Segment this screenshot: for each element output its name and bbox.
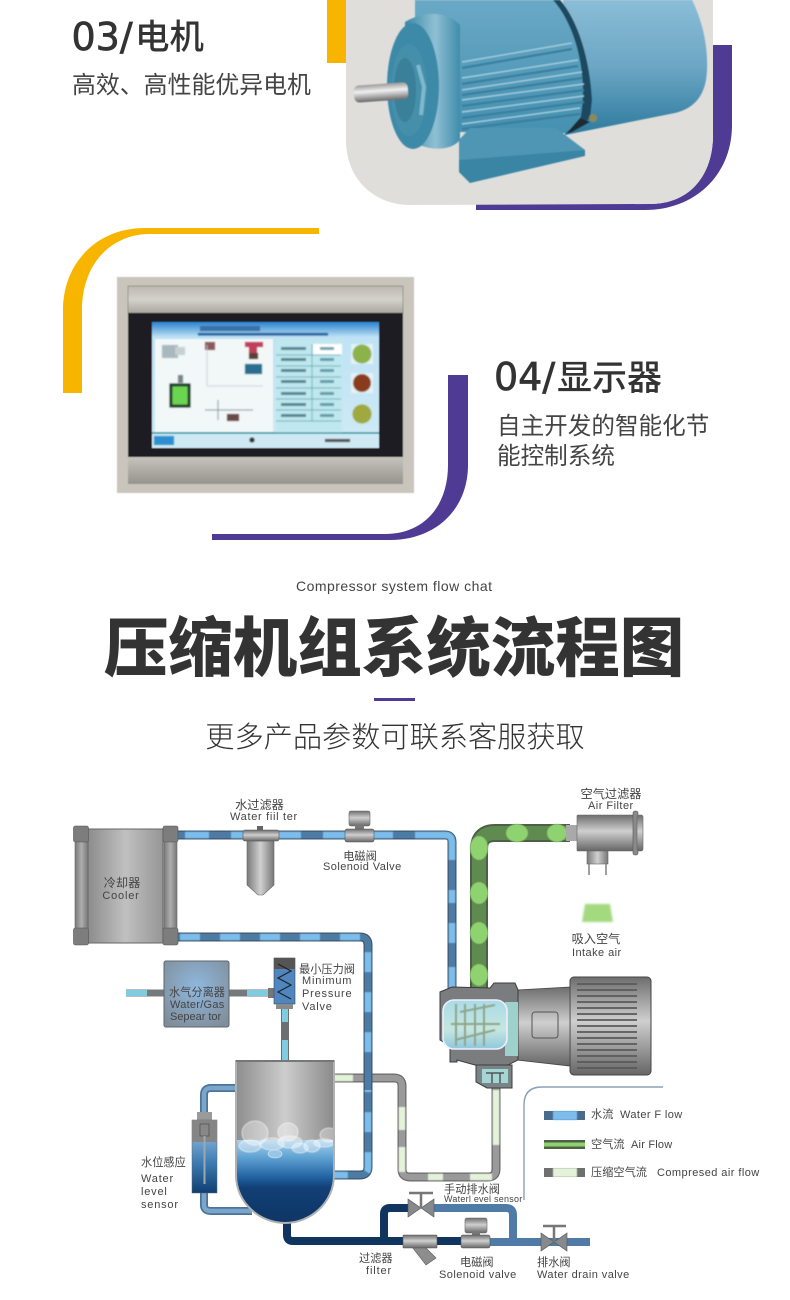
water level sensor: sensor [141,1199,179,1211]
solenoid valve top: Solenoid Valve [323,861,402,873]
heading: 04 display [494,350,662,401]
purple arc accent [212,375,468,540]
water pipes upper [177,835,452,1175]
solenoid label: 电磁阀 [343,848,377,864]
water filter [230,795,298,895]
display photo [117,277,414,493]
compressed air key: Compresed air flow [657,1167,760,1179]
heading: 03 motor: 03/ [72,15,133,59]
minimum pressure valve: Pressure [302,988,352,1000]
subheading: 更多产品参数可联系客服获取 [205,714,585,756]
description: motor: 高效、高性能优异电机 [72,65,311,100]
strainer label: 过滤器 [359,1250,393,1266]
air filter: Air Filter [588,800,634,812]
water filter label: 水过滤器 [235,795,284,813]
touch screen [152,322,379,448]
motor adapter [517,987,570,1066]
section 04: display [63,228,709,540]
air intake pipe [470,824,570,992]
motor illustration [354,0,707,183]
cooler [74,826,178,945]
air filter label: 空气过滤器 [581,784,641,802]
system flow diagram [74,784,760,1281]
outlet block [476,1065,512,1088]
water level sensor: Water [141,1173,174,1185]
purple divider [374,698,415,701]
minimum pressure valve: Minimum [302,975,352,987]
main title: 压缩机组系统流程图 [104,596,684,690]
flow chart heading [104,578,684,756]
water level sensor: level [141,1186,168,1198]
screw compressor and motor [440,977,651,1088]
water gas separator: 水气分离器 [169,984,225,1000]
yellow arc accent [63,228,319,393]
bubbles [239,1121,338,1153]
water gas separator: Water/Gas [170,999,225,1011]
solenoid valve top [323,811,402,873]
water filter: Water fiil ter [230,811,298,823]
solenoid valve bottom [439,1218,517,1281]
air filter [566,784,643,875]
water drain valve: Water drain valve [537,1269,630,1281]
manual drain valve: Waterl evel sensor [444,1194,523,1204]
y strainer: filter [366,1265,392,1277]
section 03: motor [72,0,732,210]
description: display: 能控制系统 [497,437,615,471]
intake air [572,904,622,959]
heading: 03 motor: 电机 [135,9,204,59]
water flow key: 水流 [591,1106,613,1122]
water drain valve [537,1226,630,1281]
intake air: Intake air [572,947,622,959]
separator tank [236,1061,338,1225]
pressure valve label: 最小压力阀 [299,961,355,977]
drain valve label: 排水阀 [537,1254,571,1270]
air flow key: 空气流 [591,1136,625,1152]
y strainer [359,1235,437,1277]
compressed air key: 压缩空气流 [591,1164,647,1180]
solenoid valve bottom: Solenoid valve [439,1269,517,1281]
motor fan body [570,977,651,1075]
water gas separator: Sepear tor [170,1011,222,1023]
solenoid label bottom: 电磁阀 [460,1254,494,1270]
water level sensor [141,1112,217,1211]
heading: 03 motor [72,9,204,59]
sensor pipes [204,1088,252,1211]
intake label: 吸入空气 [572,929,620,947]
air flow key [544,1136,673,1152]
manual drain valve [408,1181,523,1217]
heading: 04 display: 04/ [494,355,555,399]
air flow key: Air Flow [631,1139,673,1151]
legend [524,1087,760,1200]
water gas pipes [126,993,285,1062]
minimum pressure valve [268,958,355,1013]
cooler label: 冷却器 [104,873,140,891]
manual valve label: 手动排水阀 [444,1181,500,1197]
heading: 04 display: 显示器 [557,350,662,401]
water flow key [544,1106,683,1122]
compressed air pipe [334,1070,496,1177]
minimum pressure valve: Valve [302,1001,333,1013]
compressor housing [440,983,518,1066]
sensor label: 水位感应 [141,1154,186,1170]
water flow key: Water F low [620,1109,683,1121]
drain pipes [287,1208,590,1242]
motor photo panel [346,0,713,205]
black bezel [128,313,403,457]
yellow accent bar [327,0,346,63]
compressed air key [544,1164,760,1180]
purple corner accent [476,45,732,210]
english subtitle: Compressor system flow chat [296,578,492,594]
water gas separator [164,961,229,1027]
cooler: Cooler [102,890,140,902]
description: display: 自主开发的智能化节 [497,407,709,441]
